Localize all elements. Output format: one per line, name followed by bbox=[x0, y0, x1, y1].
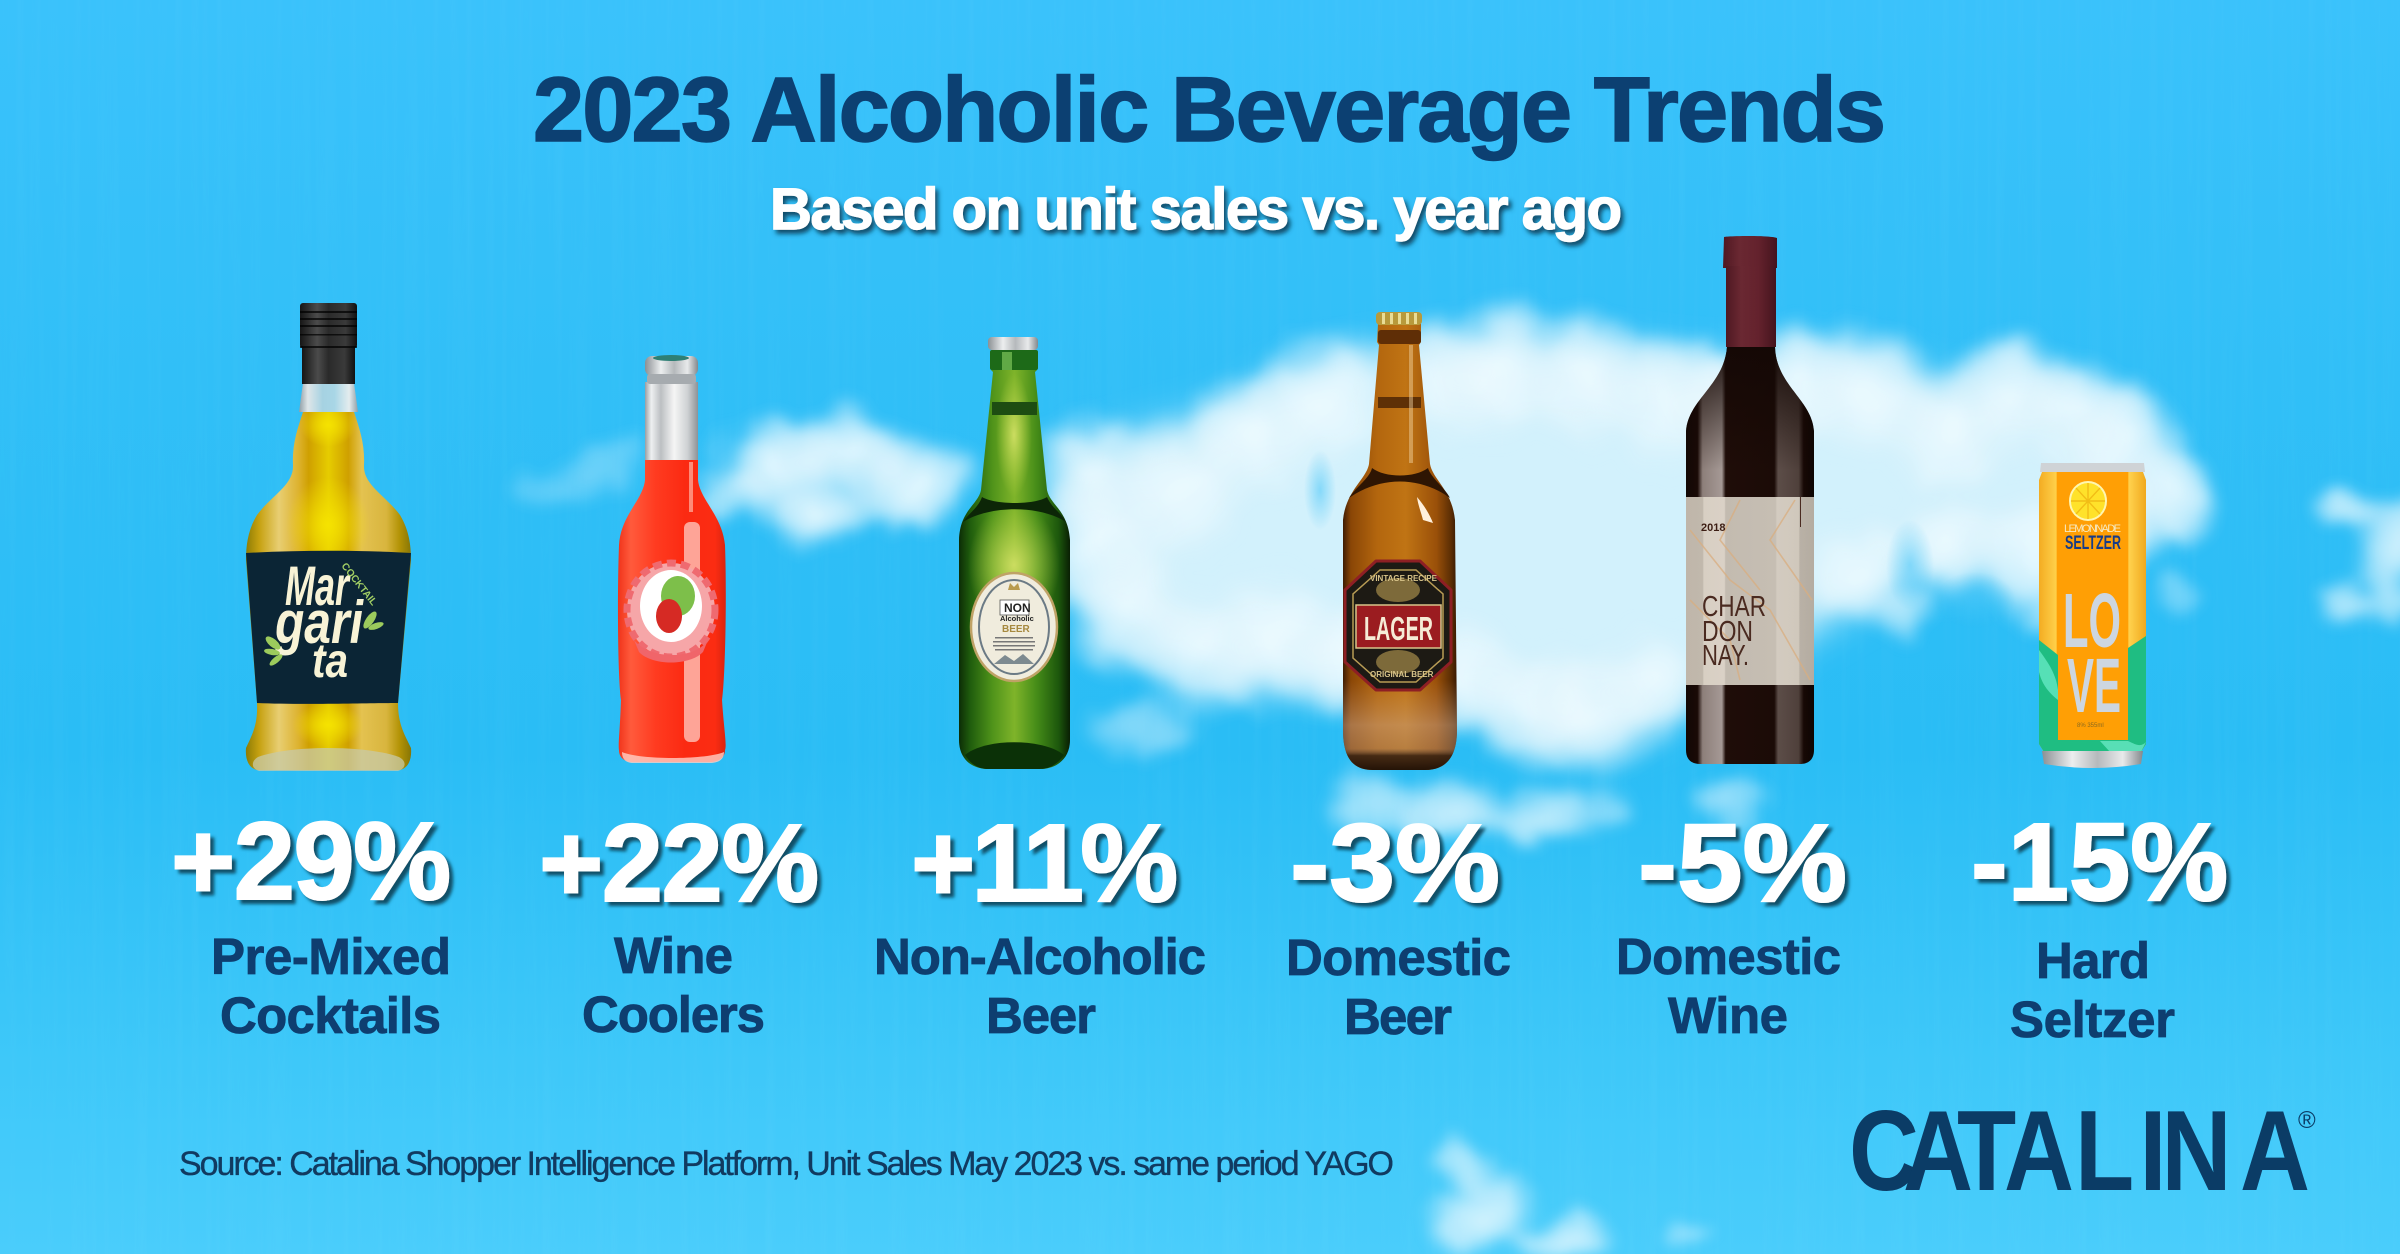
label: chardonnay bbox=[1686, 497, 1814, 685]
stat: wine coolers bbox=[539, 802, 819, 1043]
subtitle: Based on unit sales vs. year ago bbox=[770, 177, 1622, 242]
bottle: non-alcoholic beer bbox=[959, 337, 1070, 769]
stat: domestic wine: Domestic bbox=[1616, 928, 1841, 985]
label: chardonnay: DON bbox=[1702, 616, 1753, 648]
label: lager: VINTAGE RECIPE bbox=[1370, 574, 1438, 583]
stat: hard seltzer: Hard bbox=[2036, 932, 2150, 989]
stat: wine coolers: Wine bbox=[614, 927, 733, 984]
can: hard seltzer: 8% 355ml bbox=[2077, 723, 2104, 729]
can: hard seltzer: LEMONNADE bbox=[2064, 523, 2121, 535]
stat: domestic wine: -5% bbox=[1638, 802, 1847, 925]
stat: hard seltzer bbox=[1971, 801, 2228, 1048]
label: non alcoholic beer bbox=[971, 573, 1057, 681]
icon: lemon bbox=[2070, 482, 2106, 520]
stat: non-alcoholic beer bbox=[874, 802, 1206, 1044]
stat: domestic wine: Wine bbox=[1668, 987, 1788, 1044]
label: margarita: gari bbox=[274, 589, 364, 656]
logo: catalina: CATALINA bbox=[1849, 1088, 2310, 1215]
label: chardonnay: NAY. bbox=[1702, 640, 1749, 672]
stat: non-alcoholic beer: +11% bbox=[911, 802, 1178, 925]
label: lager bbox=[1345, 561, 1451, 690]
stat: domestic beer: Domestic bbox=[1286, 929, 1511, 986]
stat: wine coolers: Coolers bbox=[582, 986, 765, 1043]
label: margarita: COCKTAIL bbox=[339, 561, 379, 608]
stat: non-alcoholic beer: Non-Alcoholic bbox=[874, 928, 1206, 985]
can: hard seltzer bbox=[2039, 463, 2146, 768]
label: lager: LAGER bbox=[1364, 610, 1433, 647]
bottle: domestic wine bbox=[1686, 236, 1814, 764]
label: strawberry bbox=[627, 563, 715, 662]
stat: domestic beer: -3% bbox=[1290, 802, 1500, 925]
source note: Source: Catalina Shopper Intelligence Platform, Unit Sales May 2023 vs. same period YAGO bbox=[179, 1145, 1394, 1183]
label: non alcoholic beer: Alcoholic bbox=[1000, 614, 1034, 623]
label: non alcoholic beer: NON bbox=[1004, 601, 1031, 615]
logo: catalina: ® bbox=[2298, 1107, 2316, 1134]
label: margarita: Mar bbox=[285, 554, 351, 617]
can: hard seltzer: LO bbox=[2063, 578, 2121, 664]
bottle: domestic beer bbox=[1343, 312, 1457, 770]
stat: hard seltzer: -15% bbox=[1971, 801, 2228, 924]
stat: pre-mixed cocktails bbox=[171, 800, 451, 1044]
title: 2023 Alcoholic Beverage Trends bbox=[533, 59, 1886, 161]
label: margarita bbox=[246, 551, 411, 704]
stat: pre-mixed cocktails: Pre-Mixed bbox=[211, 928, 451, 985]
can: hard seltzer: VE bbox=[2067, 643, 2121, 729]
stat: domestic wine bbox=[1616, 802, 1847, 1044]
label: chardonnay: CHAR bbox=[1702, 591, 1766, 623]
label: non alcoholic beer: BEER bbox=[1002, 624, 1031, 635]
stat: pre-mixed cocktails: +29% bbox=[171, 800, 451, 923]
stat: pre-mixed cocktails: Cocktails bbox=[220, 987, 441, 1044]
stat: non-alcoholic beer: Beer bbox=[986, 987, 1096, 1044]
stat: hard seltzer: Seltzer bbox=[2010, 991, 2175, 1048]
stat: domestic beer bbox=[1286, 802, 1511, 1045]
bottle: pre-mixed margarita cocktail bbox=[246, 303, 411, 771]
clouds bbox=[515, 297, 2400, 1254]
stat: domestic beer: Beer bbox=[1344, 988, 1452, 1045]
bottle: wine cooler bbox=[618, 355, 726, 763]
label: margarita: ta bbox=[312, 635, 348, 688]
label: chardonnay: 2018 bbox=[1701, 522, 1725, 534]
can: hard seltzer: SELTZER bbox=[2065, 533, 2121, 554]
label: lager: ORIGINAL BEER bbox=[1370, 670, 1434, 679]
stat: wine coolers: +22% bbox=[539, 802, 819, 925]
